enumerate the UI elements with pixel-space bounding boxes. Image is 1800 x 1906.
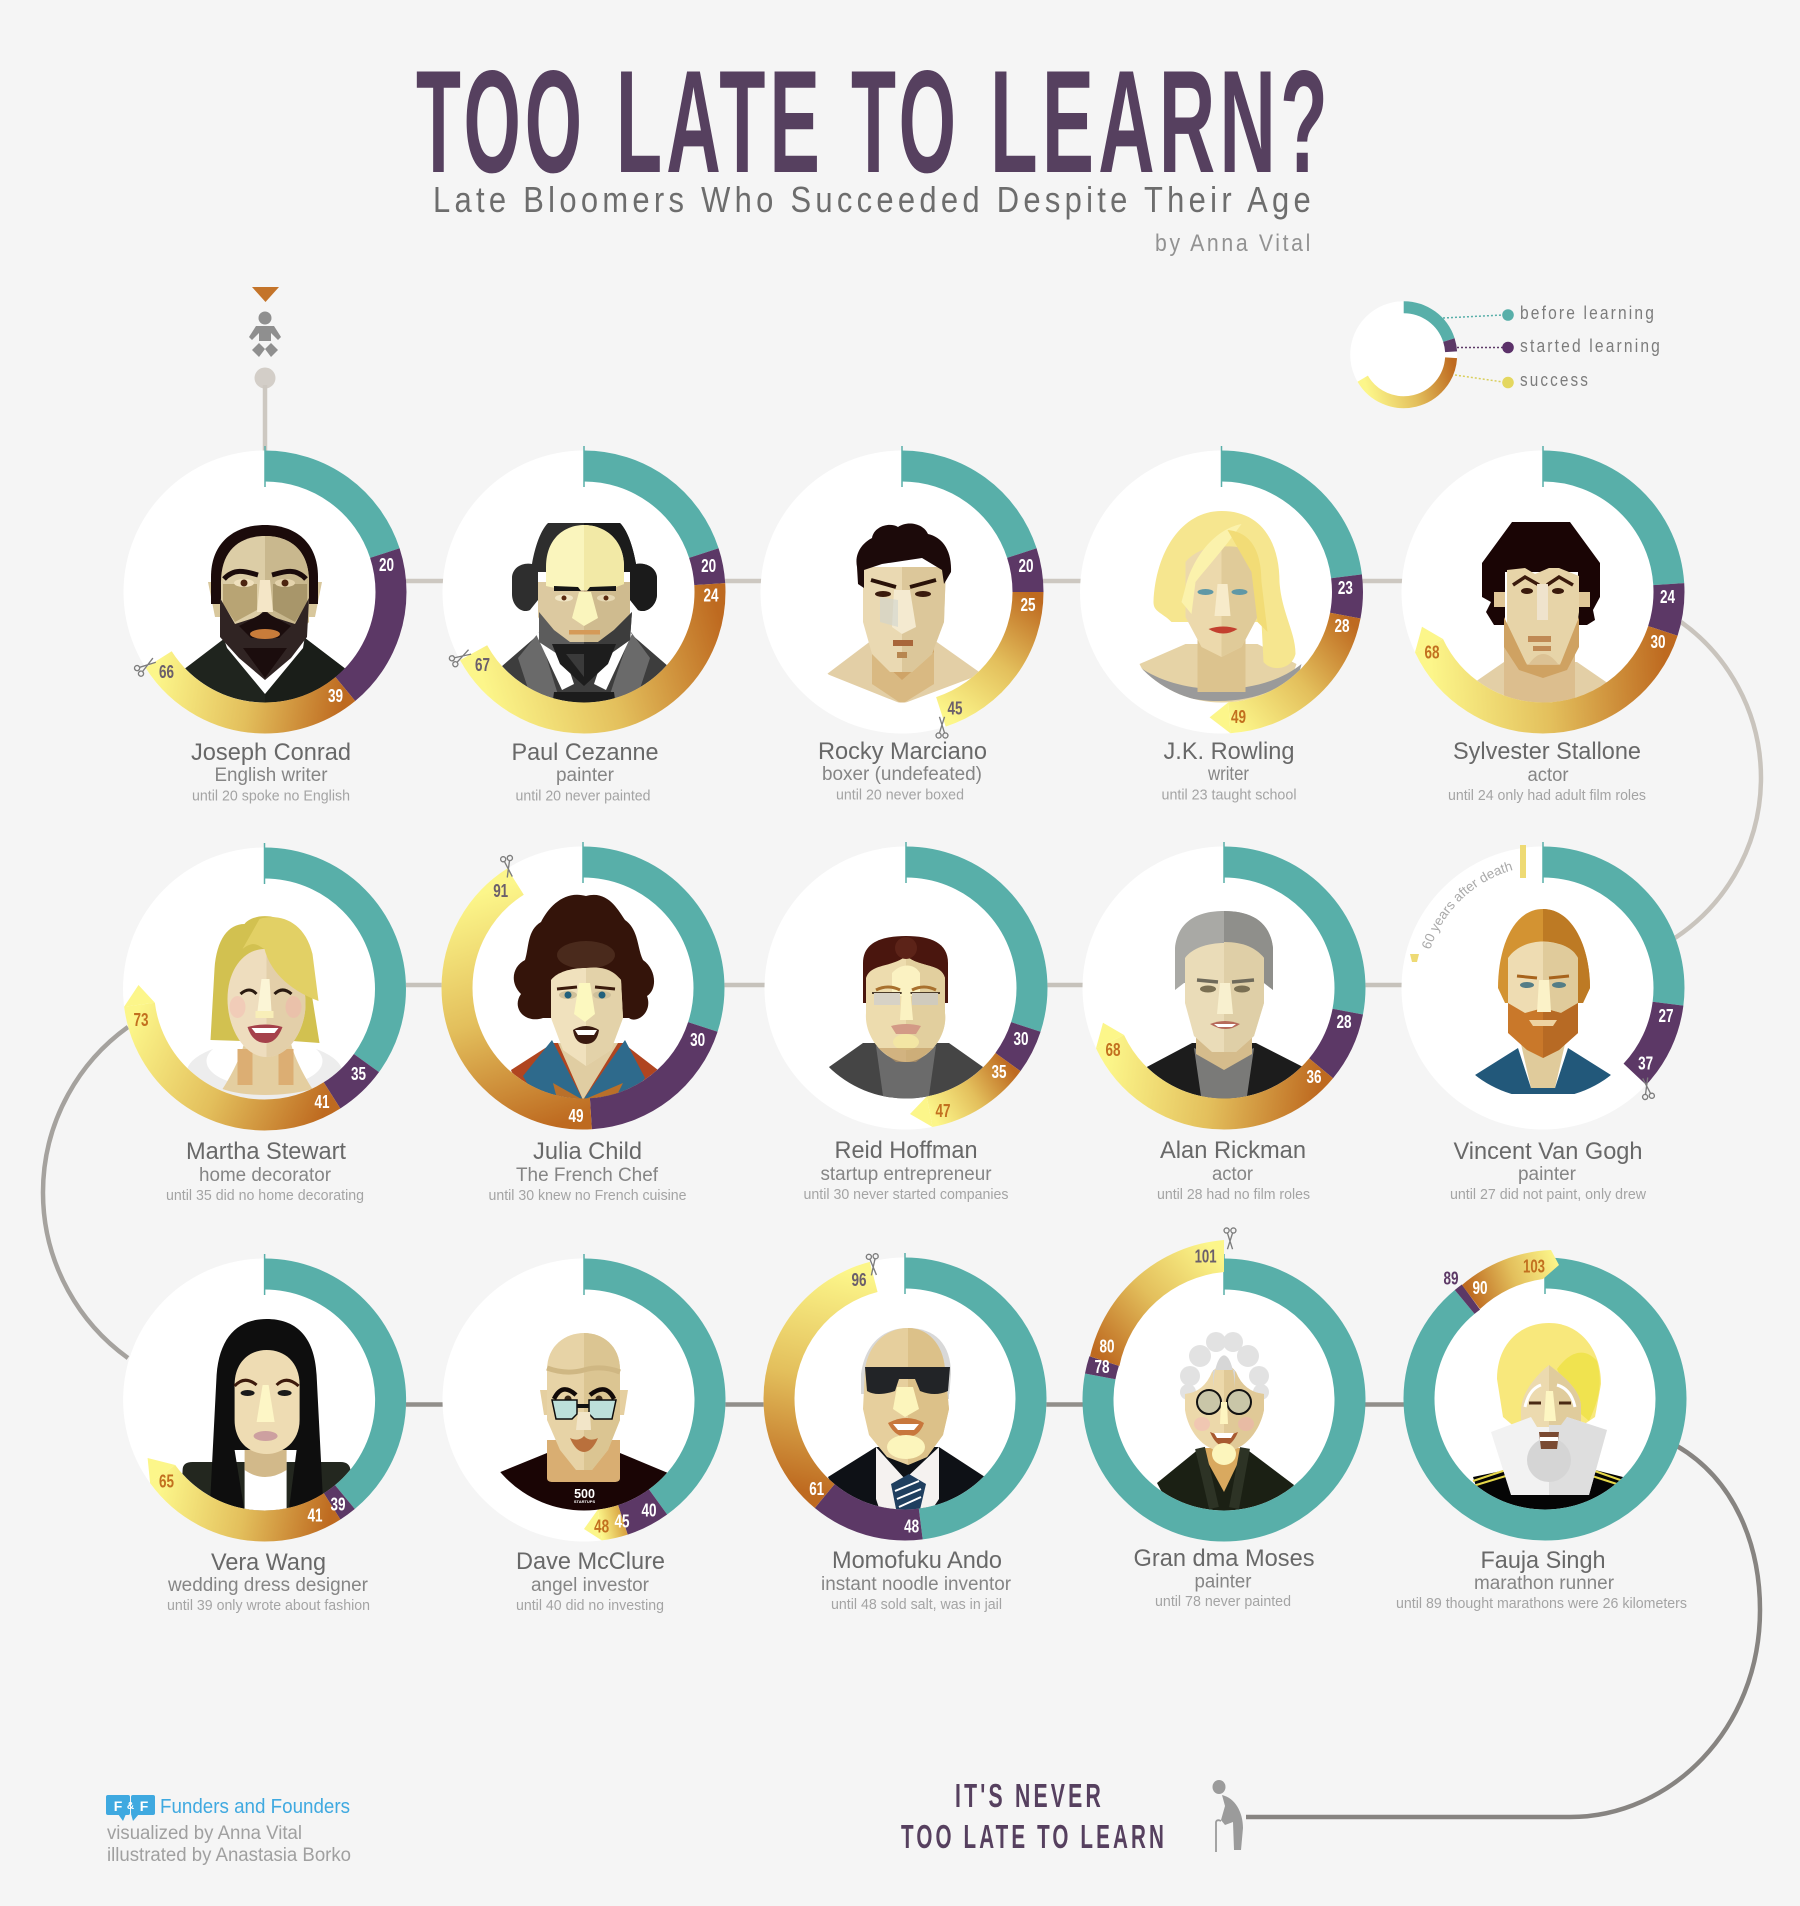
- name and description: [191, 739, 351, 804]
- icon: scissors: [134, 655, 158, 677]
- legend labels: before learning: [1520, 303, 1656, 323]
- name and description: Rocky Marciano: [818, 738, 987, 765]
- credits: illustrated by Anastasia Borko: [107, 1845, 351, 1866]
- age labels: [594, 1501, 656, 1536]
- ring segments: [1090, 1240, 1350, 1526]
- age labels: 45: [948, 699, 962, 719]
- after death path: [1430, 868, 1521, 950]
- portrait: 500: [574, 1487, 595, 1501]
- name and description: Martha Stewart: [186, 1138, 346, 1165]
- age labels: 20: [701, 556, 716, 576]
- name and description: [1134, 1545, 1314, 1610]
- name and description: boxer (undefeated): [822, 764, 982, 785]
- panel: Reid Hoffman: [764, 842, 1048, 1203]
- ring segments: [1096, 446, 1348, 733]
- age labels: 23: [1338, 578, 1353, 598]
- age labels: 20: [379, 555, 394, 575]
- ring segments: [1415, 446, 1669, 718]
- age labels: [1424, 587, 1675, 663]
- name and description: [804, 1137, 1008, 1203]
- age labels: 30: [1650, 632, 1666, 652]
- icon: baby: [249, 312, 281, 357]
- age labels: 20: [1018, 556, 1034, 576]
- age labels: [1106, 1012, 1352, 1087]
- name and description: until 40 did no investing: [516, 1597, 664, 1614]
- age labels: 28: [1334, 616, 1350, 636]
- donut with portrait: [123, 843, 406, 1130]
- name and description: actor: [1212, 1164, 1254, 1185]
- age labels: [475, 556, 718, 675]
- age labels: 101: [1195, 1247, 1217, 1267]
- panel: J.K. Rowling: [1080, 446, 1363, 804]
- icon: scissors: [1639, 1077, 1655, 1100]
- panel: Vincent Van Gogh: [1402, 842, 1684, 1203]
- name and description: Fauja Singh: [1480, 1547, 1606, 1574]
- panel: Fauja Singh: [1396, 1250, 1687, 1612]
- name and description: [1396, 1547, 1687, 1612]
- age labels: 73: [134, 1010, 148, 1030]
- name and description: The French Chef: [516, 1165, 659, 1186]
- age labels: 65: [159, 1472, 174, 1492]
- age labels: 67: [475, 655, 490, 675]
- name and description: until 35 did no home decorating: [166, 1187, 364, 1204]
- portrait: [511, 895, 658, 1103]
- ring segments: [457, 842, 709, 1114]
- name and description: [821, 1547, 1012, 1613]
- portrait: [186, 916, 342, 1105]
- icon: scissors: [448, 647, 473, 668]
- age labels: [1444, 1256, 1545, 1298]
- byline: by Anna Vital: [1155, 230, 1313, 257]
- portrait: [1140, 511, 1302, 707]
- subtitle: Late Bloomers Who Succeeded Despite Their Age: [433, 179, 1315, 220]
- age labels: 24: [1660, 587, 1675, 607]
- icon: scissors: [866, 1253, 880, 1276]
- age labels: [159, 1472, 346, 1526]
- age labels: 39: [330, 1495, 346, 1515]
- logo mark: F: [140, 1798, 149, 1814]
- title: TO: [851, 40, 960, 203]
- closing message: TOO LATE TO LEARN: [901, 1818, 1167, 1855]
- name and description: until 28 had no film roles: [1157, 1186, 1310, 1203]
- age labels: 91: [493, 881, 508, 901]
- age labels: [1638, 1006, 1674, 1074]
- panel: Grandma Moses: [1083, 1228, 1365, 1610]
- age labels: 25: [1020, 595, 1036, 615]
- age labels: 66: [159, 662, 174, 682]
- name and description: Joseph Conrad: [191, 739, 351, 766]
- donut with portrait: [1402, 446, 1684, 734]
- age labels: 103: [1523, 1256, 1545, 1276]
- age labels: 27: [1658, 1006, 1674, 1026]
- age labels: 96: [852, 1270, 866, 1290]
- start dot: [254, 368, 276, 388]
- ring segments: [124, 843, 390, 1115]
- age labels: [134, 1010, 366, 1112]
- name and description: until 20 never boxed: [836, 786, 964, 804]
- after death end dot: [1410, 954, 1419, 962]
- panel: Rocky Marciano: [760, 446, 1044, 804]
- name and description: Sylvester Stallone: [1453, 738, 1641, 765]
- credits: [107, 1823, 351, 1866]
- portrait: [181, 1319, 351, 1515]
- age labels: 89: [1444, 1269, 1458, 1289]
- age labels: 28: [1336, 1012, 1352, 1032]
- portrait: [1143, 911, 1307, 1103]
- age labels: 35: [992, 1062, 1006, 1082]
- logo mark: F: [114, 1798, 123, 1814]
- title: [416, 40, 1332, 203]
- name and description: [818, 738, 987, 804]
- donut with portrait: [442, 1254, 726, 1542]
- icon: scissors: [500, 855, 516, 878]
- age labels: [1231, 578, 1353, 727]
- logo mark: [106, 1795, 155, 1821]
- name and description: instant noodle inventor: [821, 1574, 1012, 1595]
- name and description: until 20 never painted: [516, 788, 650, 804]
- name and description: Momofuku Ando: [832, 1547, 1002, 1574]
- donut with portrait: [442, 842, 724, 1130]
- title: TOO: [416, 40, 586, 203]
- age labels: 49: [568, 1106, 584, 1126]
- name and description: English writer: [214, 765, 328, 786]
- name and description: Julia Child: [533, 1138, 642, 1165]
- age labels: [493, 881, 705, 1126]
- age labels: 48: [594, 1516, 609, 1536]
- ring segments: [779, 1253, 1031, 1525]
- panel: Paul Cezanne: [442, 446, 726, 804]
- donut with portrait: [764, 1253, 1046, 1540]
- panel: Dave McClure: [442, 1254, 726, 1614]
- age labels: 80: [1100, 1337, 1114, 1357]
- portrait: [828, 1328, 985, 1514]
- donut with portrait: [1083, 1240, 1365, 1541]
- name and description: Dave McClure: [516, 1548, 665, 1575]
- name and description: painter: [1194, 1572, 1252, 1592]
- name and description: J.K. Rowling: [1164, 738, 1294, 765]
- age labels: 30: [690, 1030, 705, 1050]
- portrait: [183, 525, 347, 707]
- name and description: until 30 knew no French cuisine: [488, 1187, 686, 1204]
- name and description: Vera Wang: [211, 1549, 326, 1576]
- ring segments: [139, 446, 391, 718]
- portrait: [498, 1333, 668, 1515]
- connector lines: [43, 385, 1761, 1817]
- ring segments: [1096, 842, 1350, 1114]
- name and description: Reid Hoffman: [834, 1137, 978, 1164]
- panel: Momofuku Ando: [764, 1253, 1046, 1613]
- title: LEARN?: [990, 40, 1332, 203]
- logo mark: &: [127, 1801, 134, 1812]
- name and description: Vincent Van Gogh: [1454, 1138, 1642, 1165]
- portrait: [1157, 1332, 1294, 1515]
- age labels: 90: [1472, 1278, 1488, 1298]
- name and description: until 39 only wrote about fashion: [167, 1597, 370, 1614]
- ring segments: [780, 842, 1032, 1127]
- donut with portrait: [1402, 842, 1684, 1130]
- panel: Julia Child: [442, 842, 724, 1204]
- legend: [1350, 301, 1662, 408]
- name and description: writer: [1207, 764, 1250, 785]
- age labels: [159, 555, 394, 706]
- age labels: 37: [1638, 1054, 1653, 1074]
- panel: Martha Stewart: [123, 843, 406, 1204]
- name and description: [1162, 738, 1296, 804]
- legend donut: [1350, 301, 1457, 408]
- name and description: Paul Cezanne: [512, 739, 658, 766]
- ring segments: [1419, 1250, 1671, 1525]
- arrow: [252, 287, 279, 302]
- age labels: 68: [1106, 1040, 1120, 1060]
- donut with portrait: [764, 842, 1048, 1130]
- name and description: marathon runner: [1474, 1573, 1615, 1594]
- name and description: [1157, 1137, 1310, 1203]
- closing message: [901, 1777, 1167, 1855]
- name and description: [516, 1548, 665, 1614]
- name and description: wedding dress designer: [167, 1575, 369, 1596]
- name and description: Gran dma Moses: [1134, 1545, 1314, 1572]
- legend labels: [1520, 303, 1662, 390]
- panel: Joseph Conrad: [124, 446, 406, 804]
- portrait: [1475, 522, 1609, 707]
- ring segments: [458, 1254, 710, 1540]
- donut with portrait: [1080, 446, 1363, 734]
- panel: Vera Wang: [123, 1254, 406, 1614]
- Funders and Founders logo: [106, 1795, 350, 1821]
- ring segments: [1417, 842, 1669, 1114]
- age labels: 47: [936, 1101, 950, 1121]
- name and description: actor: [1528, 765, 1569, 786]
- age labels: 30: [1014, 1029, 1028, 1049]
- 60 years after death marker: [1520, 845, 1526, 878]
- name and description: [488, 1138, 686, 1204]
- name and description: until 24 only had adult film roles: [1448, 787, 1646, 804]
- name and description: until 30 never started companies: [804, 1186, 1008, 1203]
- portrait: [827, 523, 982, 704]
- age labels: 36: [1306, 1067, 1322, 1087]
- legend leader lines: [1443, 315, 1503, 382]
- age labels: 39: [328, 686, 343, 706]
- name and description: startup entrepreneur: [820, 1164, 992, 1185]
- portrait: [1473, 1323, 1623, 1514]
- timeline start marker: [249, 287, 281, 388]
- name and description: painter: [1518, 1164, 1577, 1185]
- 60 years after death text: 60 years after death: [1422, 862, 1512, 948]
- legend labels: success: [1520, 370, 1590, 390]
- ring segments: [139, 1254, 391, 1526]
- donut with portrait: [760, 446, 1044, 734]
- portrait: [501, 523, 669, 707]
- age labels: 78: [1094, 1357, 1110, 1377]
- logo wordmark: Funders and Founders: [160, 1796, 350, 1818]
- icon: scissors: [936, 717, 948, 738]
- age labels: 61: [809, 1479, 824, 1499]
- name and description: Alan Rickman: [1160, 1137, 1306, 1164]
- age labels: 35: [351, 1064, 366, 1084]
- donut with portrait: [1082, 842, 1366, 1130]
- panel: Alan Rickman: [1082, 842, 1366, 1203]
- name and description: painter: [556, 765, 615, 786]
- portrait: [829, 936, 983, 1103]
- name and description: [512, 739, 658, 804]
- icon: old man with cane: [1212, 1780, 1243, 1852]
- panel: Sylvester Stallone: [1402, 446, 1684, 804]
- age labels: [948, 556, 1036, 719]
- name and description: [166, 1138, 364, 1204]
- age labels: 49: [1231, 707, 1246, 727]
- name and description: until 78 never painted: [1155, 1593, 1291, 1610]
- age labels: 24: [704, 586, 718, 606]
- age labels: [809, 1270, 919, 1536]
- name and description: until 48 sold salt, was in jail: [831, 1596, 1002, 1613]
- portrait: STARTUPS: [574, 1499, 595, 1504]
- name and description: [1448, 738, 1646, 804]
- legend dots: [1502, 309, 1514, 388]
- name and description: until 20 spoke no English: [192, 788, 350, 804]
- name and description: [167, 1549, 370, 1614]
- donut with portrait: [442, 446, 726, 734]
- age labels: 40: [642, 1501, 656, 1521]
- icon: scissors: [1224, 1228, 1236, 1249]
- name and description: home decorator: [199, 1165, 332, 1186]
- closing message: IT'S NEVER: [955, 1777, 1104, 1814]
- portrait: [1475, 909, 1611, 1094]
- age labels: [936, 1029, 1028, 1121]
- title: LATE: [616, 40, 824, 203]
- age labels: 68: [1424, 643, 1440, 663]
- name and description: until 27 did not paint, only drew: [1450, 1186, 1646, 1203]
- ring segments: [458, 446, 710, 718]
- legend labels: started learning: [1520, 336, 1662, 356]
- age labels: 45: [614, 1512, 630, 1532]
- age labels: 48: [904, 1516, 919, 1536]
- name and description: until 89 thought marathons were 26 kilometers: [1396, 1595, 1687, 1612]
- age labels: [1094, 1247, 1217, 1377]
- age labels: 41: [314, 1092, 330, 1112]
- ring segments: [776, 446, 1028, 718]
- name and description: [1450, 1138, 1646, 1203]
- credits: visualized by Anna Vital: [107, 1823, 302, 1844]
- donut with portrait: [123, 1254, 406, 1542]
- donut with portrait: [124, 446, 406, 734]
- name and description: angel investor: [531, 1575, 650, 1596]
- age labels: 41: [308, 1506, 322, 1526]
- donut with portrait: [1405, 1250, 1685, 1539]
- name and description: until 23 taught school: [1162, 786, 1296, 804]
